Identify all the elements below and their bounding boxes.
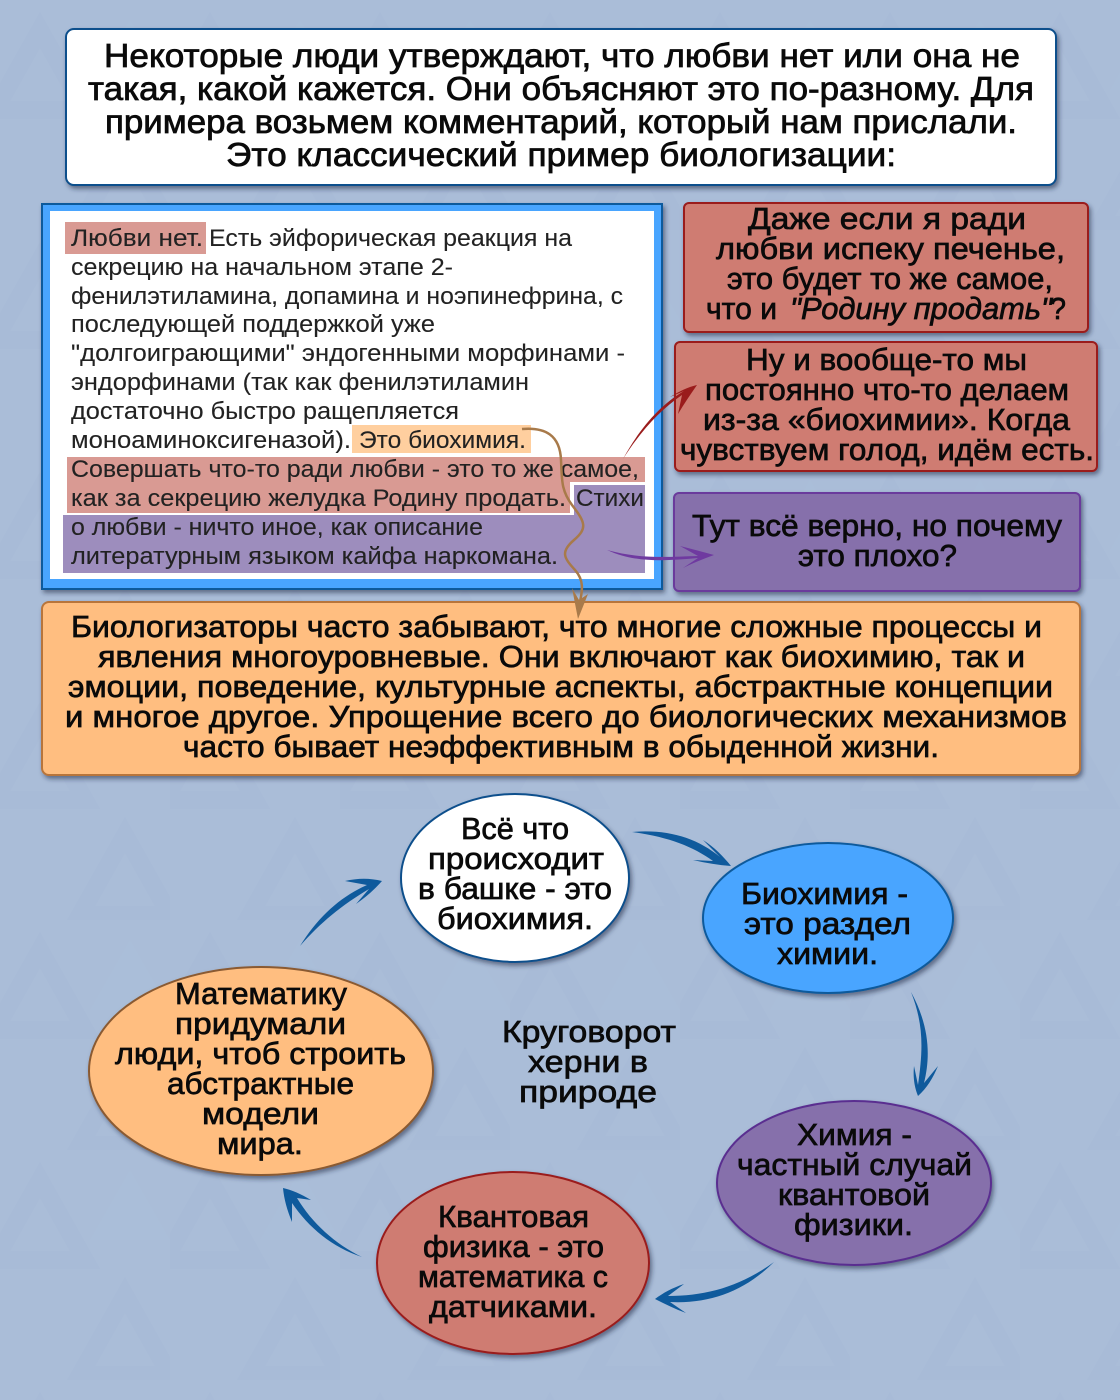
panel: biologizers conclusion: эмоции, поведение, культурные аспекты, абстрактные концепции — [68, 669, 1053, 704]
arrow: red to hunger example — [623, 385, 697, 459]
node: everything is biochemistry — [401, 794, 629, 962]
cycle caption: херни в — [528, 1044, 648, 1079]
arrow: back to everything is biochemistry — [300, 879, 382, 946]
comment text: "долгоиграющими" эндогенными морфинами - — [71, 340, 625, 367]
node: biochemistry is chemistry: химии. — [777, 936, 878, 971]
comment text: Стихи — [576, 485, 644, 512]
arrow: to chemistry — [911, 992, 938, 1096]
title text: примера возьмем комментарий, который нам прислали. — [105, 103, 1017, 140]
node: maths was invented by people — [89, 967, 433, 1175]
comment text: секрецию на начальном этапе 2- — [71, 254, 453, 281]
node: everything is biochemistry: Всё что — [461, 811, 569, 846]
panel: biologizers conclusion — [42, 602, 1080, 775]
highlight: doing things for love — [67, 457, 645, 513]
comment text: литературным языком кайфа наркомана. — [71, 543, 558, 570]
node: quantum physics is maths: математика с — [418, 1259, 608, 1294]
arrow: to quantum physics — [655, 1262, 774, 1313]
comment text: о любви - ничто иное, как описание — [71, 514, 483, 541]
comment text: как за секрецию желудка Родину продать. — [71, 485, 566, 512]
node: maths was invented by people: модели — [202, 1096, 319, 1131]
cycle caption: природе — [519, 1074, 657, 1109]
title text: такая, какой кажется. Они объясняют это по-разному. Для — [88, 70, 1034, 107]
node: quantum physics is maths — [377, 1172, 649, 1354]
comment text: Совершать что-то ради любви - это то же самое, — [71, 456, 639, 483]
panel: why is it bad: Тут всё верно, но почему — [692, 508, 1063, 543]
comment text: Это биохимия. — [359, 427, 526, 454]
title text: Некоторые люди утверждают, что любви нет или она не — [104, 37, 1020, 74]
comment text: фенилэтиламина, допамина и ноэпинефрина, с — [71, 283, 623, 310]
comment text: последующей поддержкой уже — [71, 311, 435, 338]
panel: hunger example: Ну и вообще-то мы — [746, 342, 1027, 377]
node: chemistry is quantum physics: квантовой — [778, 1177, 930, 1212]
cycle caption: Круговорот — [502, 1014, 676, 1049]
panel: why is it bad: это плохо? — [798, 538, 957, 573]
panel: cookie question: любви испеку печенье, — [716, 231, 1065, 266]
node: quantum physics is maths: физика - это — [423, 1229, 604, 1264]
panel: hunger example — [675, 342, 1097, 471]
arrow: wavy brown to conclusion — [522, 429, 588, 619]
title text: Это классический пример биологизации: — [226, 136, 896, 173]
node: biochemistry is chemistry: это раздел — [744, 906, 911, 941]
node: everything is biochemistry: биохимия. — [437, 901, 593, 936]
panel: cookie question — [684, 201, 1088, 332]
panel: cookie question: что и — [706, 291, 777, 326]
panel: why is it bad — [674, 493, 1080, 591]
arrow: to maths — [283, 1188, 362, 1257]
comment text: Любви нет. — [71, 225, 203, 252]
node: everything is biochemistry: происходит — [428, 841, 604, 876]
panel: biologizers conclusion: и многое другое. Упрощение всего до биологических механизмов — [65, 699, 1067, 734]
panel: biologizers conclusion: явления многоуровневые. Они включают как биохимию, так и — [98, 639, 1025, 674]
node: chemistry is quantum physics: частный случай — [737, 1147, 972, 1182]
node: maths was invented by people: придумали — [175, 1006, 346, 1041]
panel: hunger example: из-за «биохимии». Когда — [703, 402, 1071, 437]
comment text — [71, 225, 644, 570]
highlight: no love — [65, 222, 206, 254]
panel: biologizers conclusion: Биологизаторы часто забывают, что многие сложные процессы и — [71, 609, 1042, 644]
arrow: purple to why-bad box — [607, 546, 714, 568]
highlight: poems about love — [63, 485, 645, 573]
highlight: this is biochemistry — [352, 425, 531, 453]
panel: cookie question: ? — [1050, 291, 1066, 326]
comment text: эндорфинами (так как фенилэтиламин — [71, 369, 529, 396]
panel: hunger example: чувствуем голод, идём есть. — [680, 432, 1094, 467]
node: maths was invented by people: абстрактные — [167, 1066, 354, 1101]
node: chemistry is quantum physics: физики. — [794, 1207, 913, 1242]
node: biochemistry is chemistry — [703, 843, 953, 993]
arrow: to biochemistry — [632, 831, 731, 866]
panel: quoted comment — [42, 204, 662, 589]
node: maths was invented by people: Математику — [175, 976, 347, 1011]
node: maths was invented by people: люди, чтоб строить — [115, 1036, 406, 1071]
cycle diagram — [89, 794, 991, 1354]
title text — [88, 37, 1034, 173]
panel: biologizers conclusion: часто бывает неэффективным в обыденной жизни. — [183, 729, 939, 764]
node: biochemistry is chemistry: Биохимия - — [741, 876, 908, 911]
node: chemistry is quantum physics — [717, 1101, 991, 1265]
panel: cookie question: "Родину продать" — [790, 291, 1054, 326]
comment text: Есть эйфорическая реакция на — [209, 225, 572, 252]
node: maths was invented by people: мира. — [217, 1126, 303, 1161]
title panel — [66, 29, 1056, 185]
node: quantum physics is maths: датчиками. — [429, 1289, 597, 1324]
node: quantum physics is maths: Квантовая — [438, 1199, 589, 1234]
comment text: достаточно быстро ращепляется — [71, 398, 459, 425]
comment text: моноаминоксигеназой). — [71, 427, 351, 454]
panel: cookie question: Даже если я ради — [748, 201, 1026, 236]
panel: hunger example: постоянно что-то делаем — [705, 372, 1069, 407]
node: everything is biochemistry: в башке - это — [418, 871, 612, 906]
node: chemistry is quantum physics: Химия - — [797, 1117, 912, 1152]
cycle caption — [502, 1014, 676, 1109]
panel: cookie question: это будет то же самое, — [727, 261, 1053, 296]
